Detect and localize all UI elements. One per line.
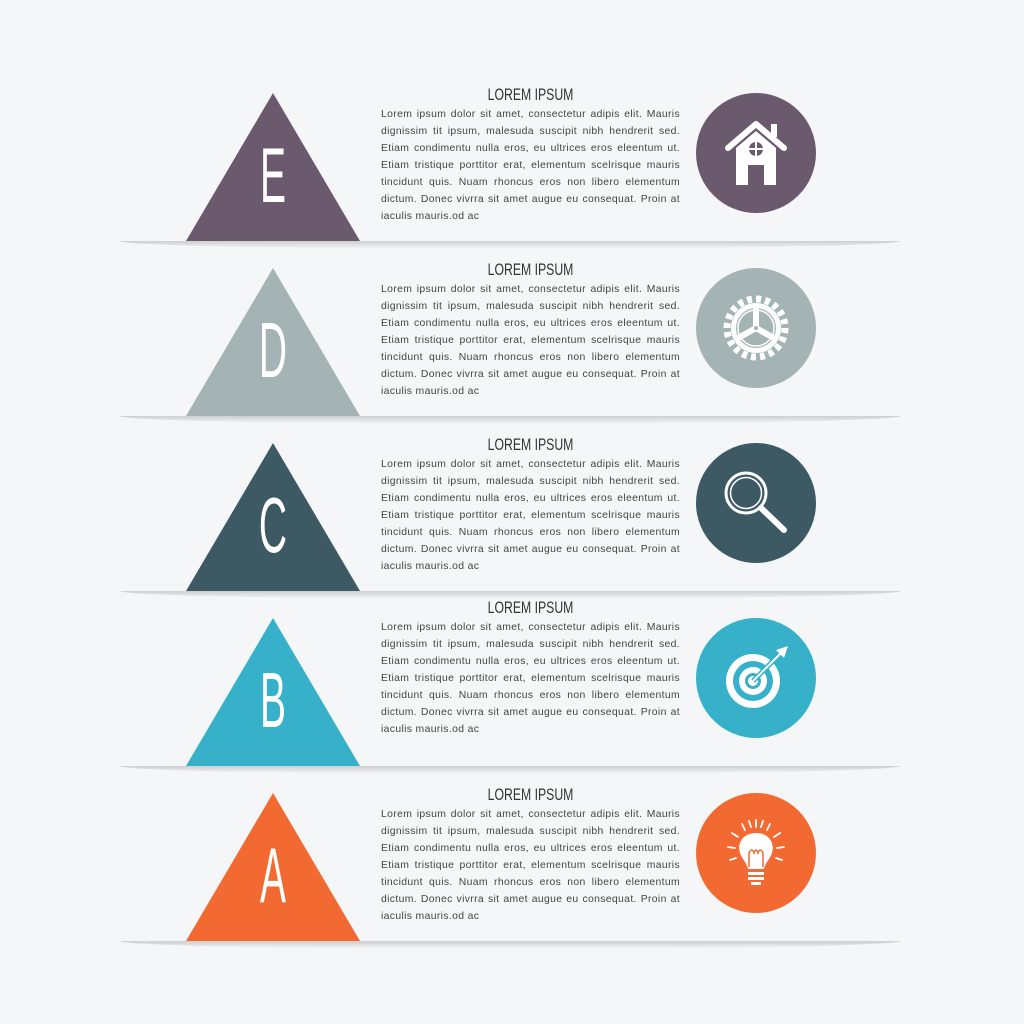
text B: Etiam tristique porttitor erat, elementum scelrisque mauris bbox=[381, 673, 680, 684]
text B: Lorem ipsum dolor sit amet, consectetur adipis elit. Mauris bbox=[381, 622, 680, 633]
row E bbox=[186, 85, 816, 241]
row B bbox=[186, 598, 816, 766]
text E: Etiam condimentu nulla eros, eu ultrices eros eleentum ut. bbox=[381, 143, 680, 154]
triangle B bbox=[186, 618, 360, 766]
row D bbox=[186, 260, 816, 416]
text A: Lorem ipsum dolor sit amet, consectetur adipis elit. Mauris bbox=[381, 809, 680, 820]
text C: iaculis mauris.od ac bbox=[381, 561, 479, 572]
title A: LOREM IPSUM bbox=[488, 785, 574, 804]
text E bbox=[381, 109, 680, 222]
icon: gear bbox=[696, 268, 816, 388]
icon: house bbox=[696, 93, 816, 213]
triangle B: B bbox=[260, 657, 286, 745]
triangle A bbox=[186, 793, 360, 941]
text A: tincidunt quis. Nuam rhoncus eros non libero elementum bbox=[381, 877, 680, 888]
triangle D bbox=[186, 268, 360, 416]
text D: tincidunt quis. Nuam rhoncus eros non libero elementum bbox=[381, 352, 680, 363]
shadow bbox=[120, 591, 900, 599]
text D: Etiam condimentu nulla eros, eu ultrices eros eleentum ut. bbox=[381, 318, 680, 329]
text D: dictum. Donec vivrra sit amet augue eu consequat. Proin at bbox=[381, 369, 680, 380]
text D bbox=[381, 284, 680, 397]
text A: dignissim tit ipsum, malesuda suscipit nibh hendrerit sed. bbox=[381, 826, 680, 837]
shadow bbox=[120, 416, 900, 424]
text B: dignissim tit ipsum, malesuda suscipit nibh hendrerit sed. bbox=[381, 639, 680, 650]
text A bbox=[381, 809, 680, 922]
text A: iaculis mauris.od ac bbox=[381, 911, 479, 922]
text D: iaculis mauris.od ac bbox=[381, 386, 479, 397]
icon: target bbox=[696, 618, 816, 738]
icon: light bulb bbox=[696, 793, 816, 913]
title C: LOREM IPSUM bbox=[488, 435, 574, 454]
text C: Etiam tristique porttitor erat, elementum scelrisque mauris bbox=[381, 510, 680, 521]
text D: Etiam tristique porttitor erat, elementum scelrisque mauris bbox=[381, 335, 680, 346]
text C: tincidunt quis. Nuam rhoncus eros non libero elementum bbox=[381, 527, 680, 538]
row C bbox=[186, 435, 816, 591]
text E: dignissim tit ipsum, malesuda suscipit nibh hendrerit sed. bbox=[381, 126, 680, 137]
shadow bbox=[120, 941, 900, 949]
text A: dictum. Donec vivrra sit amet augue eu consequat. Proin at bbox=[381, 894, 680, 905]
title E: LOREM IPSUM bbox=[488, 85, 574, 104]
text E: Etiam tristique porttitor erat, elementum scelrisque mauris bbox=[381, 160, 680, 171]
text B bbox=[381, 622, 680, 735]
text C: dignissim tit ipsum, malesuda suscipit nibh hendrerit sed. bbox=[381, 476, 680, 487]
text D: dignissim tit ipsum, malesuda suscipit nibh hendrerit sed. bbox=[381, 301, 680, 312]
text C: Lorem ipsum dolor sit amet, consectetur adipis elit. Mauris bbox=[381, 459, 680, 470]
text C bbox=[381, 459, 680, 572]
text E: dictum. Donec vivrra sit amet augue eu consequat. Proin at bbox=[381, 194, 680, 205]
shadow bbox=[120, 241, 900, 249]
text C: dictum. Donec vivrra sit amet augue eu consequat. Proin at bbox=[381, 544, 680, 555]
text E: tincidunt quis. Nuam rhoncus eros non libero elementum bbox=[381, 177, 680, 188]
text B: tincidunt quis. Nuam rhoncus eros non libero elementum bbox=[381, 690, 680, 701]
text B: dictum. Donec vivrra sit amet augue eu consequat. Proin at bbox=[381, 707, 680, 718]
icon: magnifier bbox=[696, 443, 816, 563]
title D: LOREM IPSUM bbox=[488, 260, 574, 279]
title B: LOREM IPSUM bbox=[488, 598, 574, 617]
shadow bbox=[120, 766, 900, 774]
text E: iaculis mauris.od ac bbox=[381, 211, 479, 222]
text D: Lorem ipsum dolor sit amet, consectetur adipis elit. Mauris bbox=[381, 284, 680, 295]
text A: Etiam tristique porttitor erat, elementum scelrisque mauris bbox=[381, 860, 680, 871]
text A: Etiam condimentu nulla eros, eu ultrices eros eleentum ut. bbox=[381, 843, 680, 854]
triangle E: E bbox=[260, 132, 286, 220]
triangle A: A bbox=[260, 832, 286, 920]
triangle D: D bbox=[259, 307, 287, 395]
text B: Etiam condimentu nulla eros, eu ultrices eros eleentum ut. bbox=[381, 656, 680, 667]
text B: iaculis mauris.od ac bbox=[381, 724, 479, 735]
triangle E bbox=[186, 93, 360, 241]
text E: Lorem ipsum dolor sit amet, consectetur adipis elit. Mauris bbox=[381, 109, 680, 120]
text C: Etiam condimentu nulla eros, eu ultrices eros eleentum ut. bbox=[381, 493, 680, 504]
triangle C bbox=[186, 443, 360, 591]
row A bbox=[186, 785, 816, 941]
triangle C: C bbox=[259, 482, 287, 570]
